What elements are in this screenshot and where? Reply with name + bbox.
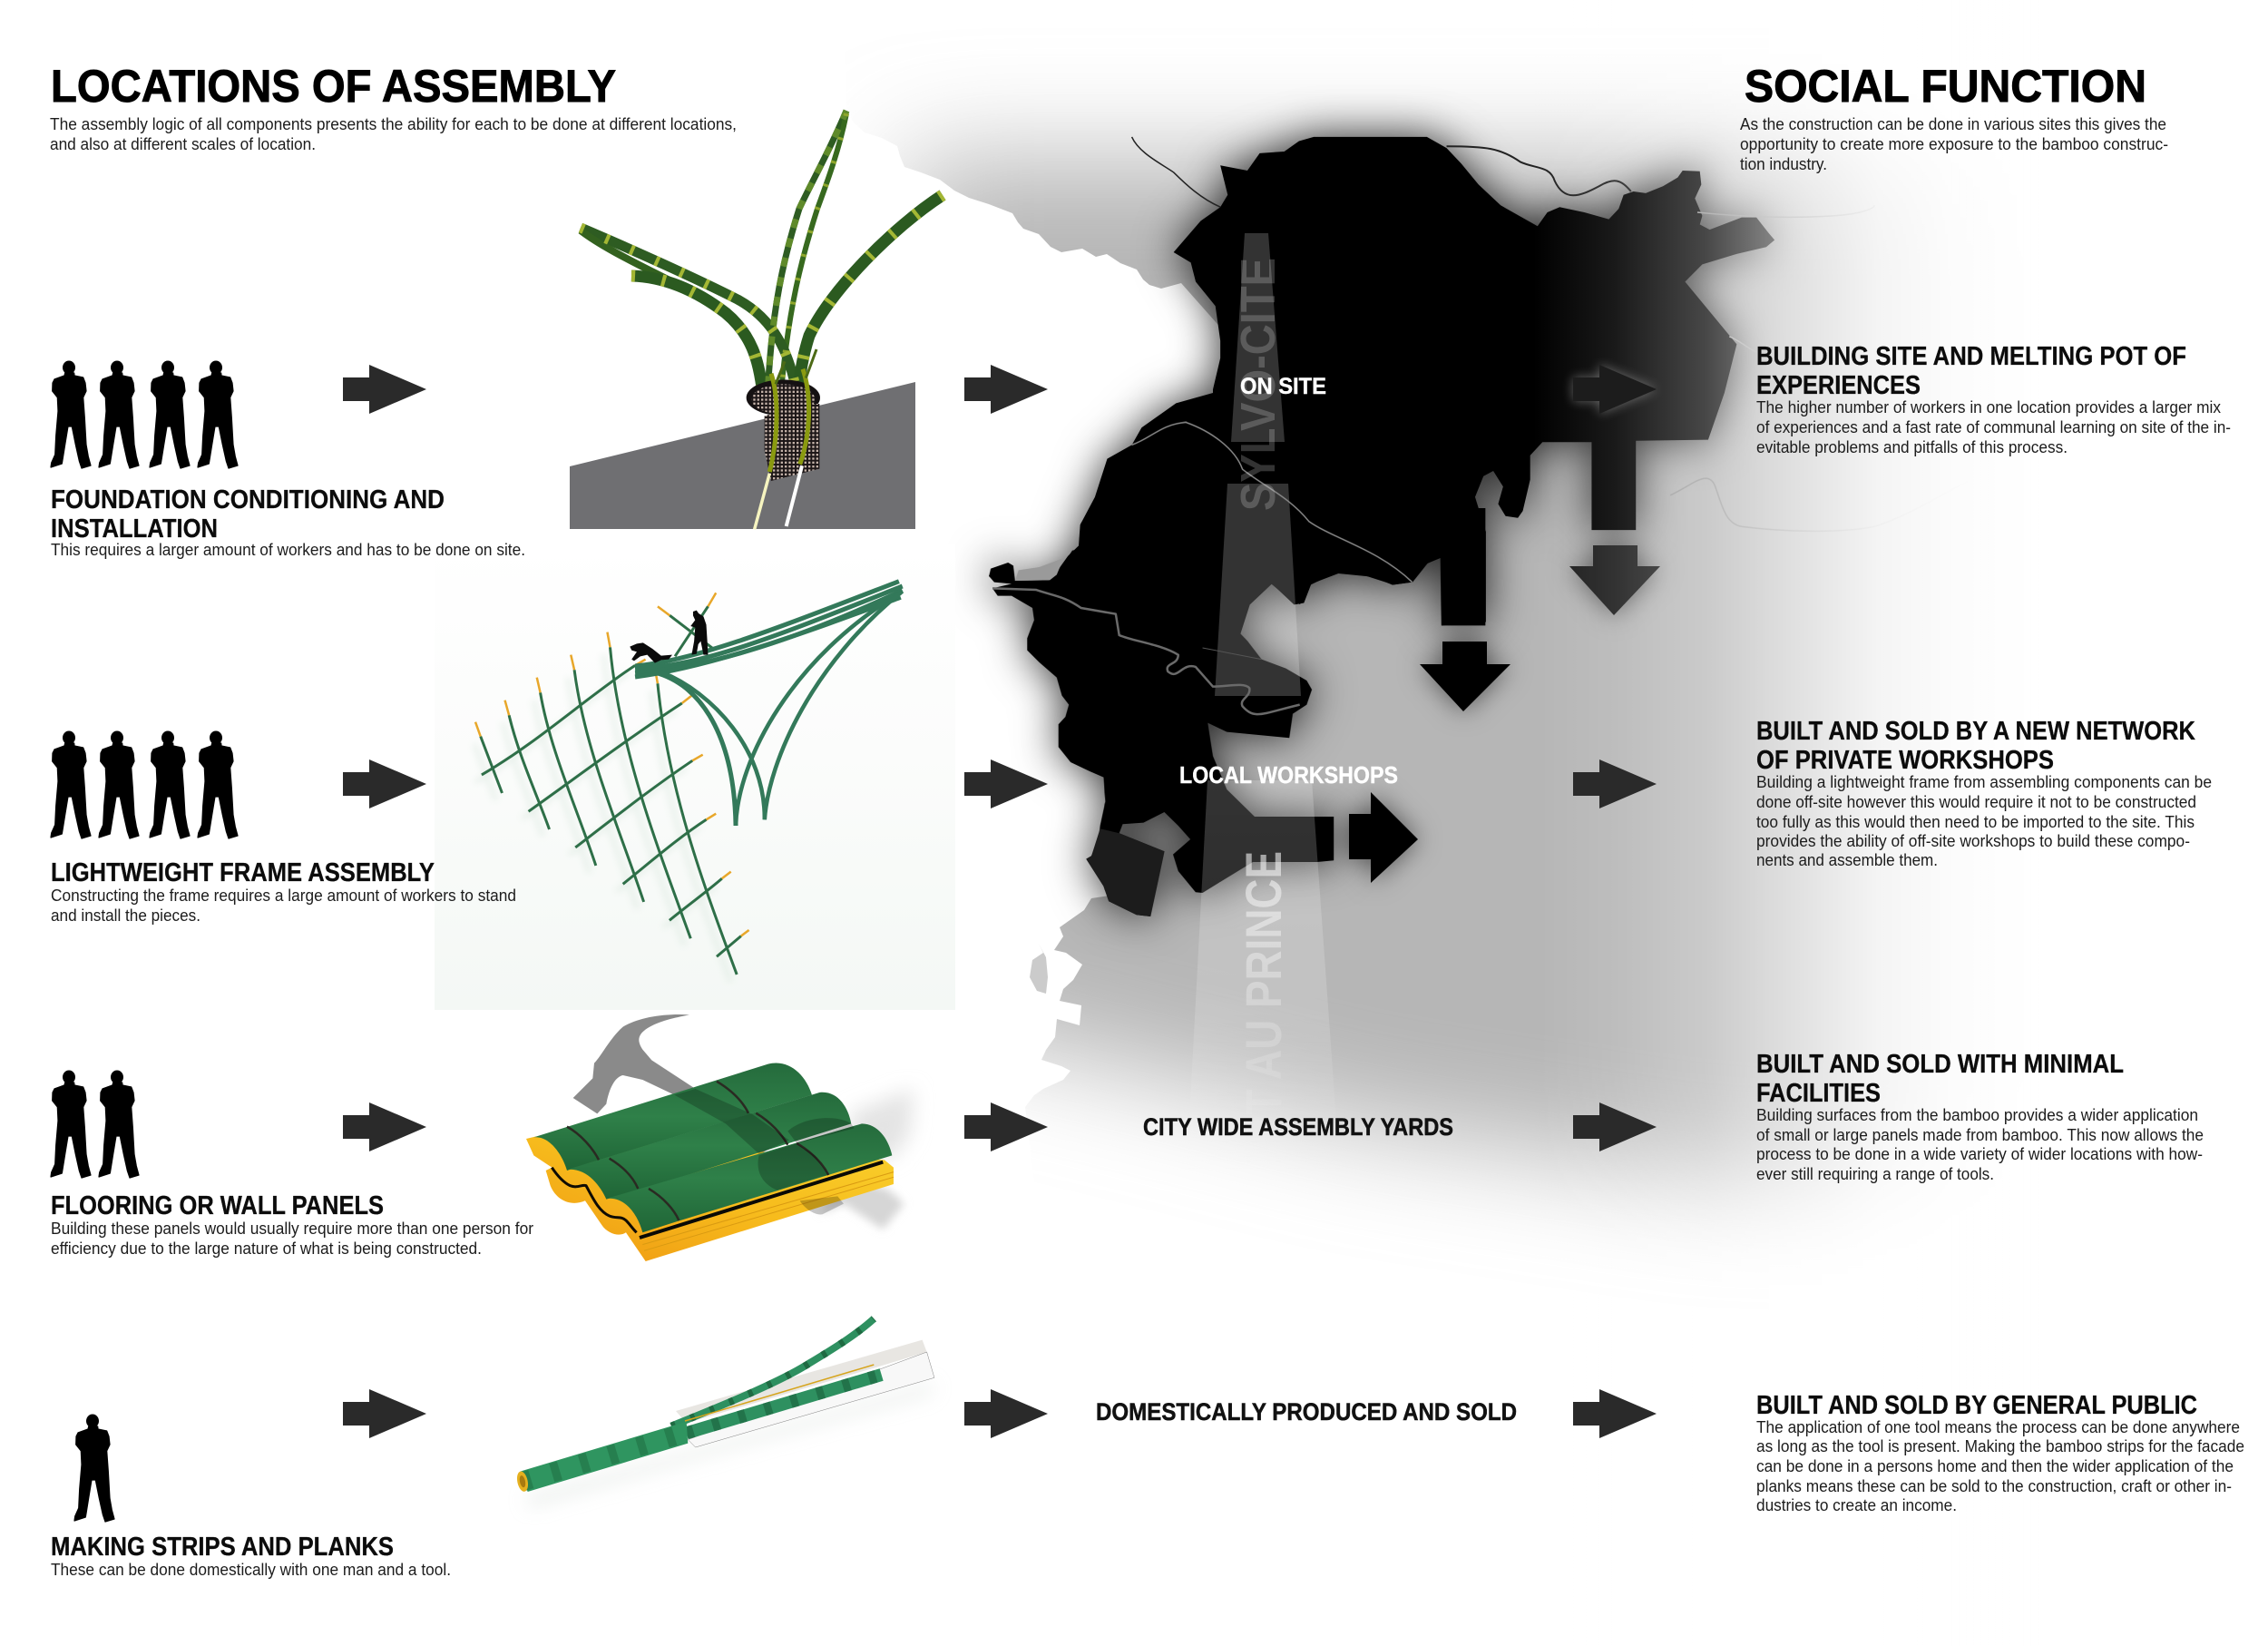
arrow: row 2 component to location [964, 759, 1048, 808]
big arrow: on site down [1569, 545, 1660, 615]
arrow: on site to social function [1573, 365, 1657, 414]
intro text: social function: As the construction can be done in various sites this gives the [1740, 115, 2166, 133]
text: flooring or wall panels [51, 1191, 533, 1258]
white fade over the right side of the map [1533, 0, 2268, 1646]
map: rivers [992, 137, 1968, 714]
text: general public: planks means these can be sold to the construction, craft or other in- [1756, 1477, 2232, 1495]
figure: kneeling worker [630, 642, 672, 663]
label: city wide assembly yards: CITY WIDE ASSEMBLY YARDS [1143, 1113, 1453, 1141]
text: foundation conditioning: FOUNDATION CONDITIONING AND [51, 485, 445, 514]
foundation sticks and spikes [755, 349, 816, 529]
row 4 worker: single figure [74, 1414, 114, 1522]
white coastline land mass [0, 0, 1252, 1646]
map: grey strait patch [1015, 558, 1063, 581]
map: PORT AU PRINCE road name: PORT AU PRINCE [1235, 851, 1292, 1205]
background: blurred grey map field [907, 159, 2087, 1180]
text: minimal facilities: Building surfaces from the bamboo provides a wider application [1756, 1106, 2198, 1124]
text: lightweight frame assembly: LIGHTWEIGHT FRAME ASSEMBLY [51, 858, 435, 887]
panel: dark joints [567, 1082, 828, 1220]
label: local workshops: LOCAL WORKSHOPS [1179, 761, 1398, 789]
text: private workshops: done off-site however this would require it not to be constructed [1756, 793, 2196, 811]
panel: green bamboo tiles [533, 1063, 892, 1232]
arrow: row 4 worker to component [343, 1389, 426, 1438]
arrow: row 4 component to location [964, 1389, 1048, 1438]
arrow: domestic to social function [1573, 1389, 1657, 1438]
text: minimal facilities [1756, 1050, 2204, 1183]
hammer silhouette [573, 1014, 789, 1154]
text: flooring or wall panels: FLOORING OR WALL PANELS [51, 1191, 384, 1220]
text: making strips and planks: These can be done domestically with one man and a tool. [51, 1561, 451, 1579]
tool: paper sheet [676, 1340, 934, 1447]
text: foundation conditioning: This requires a larger amount of workers and has to be done on site. [51, 541, 525, 559]
text: general public: The application of one tool means the process can be done anywhere [1756, 1418, 2240, 1436]
text: general public [1756, 1391, 2244, 1514]
map: southern landmass and workshop stem [989, 508, 1485, 916]
title: locations of assembly: LOCATIONS OF ASSEMBLY [51, 61, 616, 112]
row 1 workers: four figures [51, 361, 238, 468]
arrow: row 1 workers to component [343, 365, 426, 414]
title: social function: SOCIAL FUNCTION [1745, 61, 2146, 112]
text: private workshops: BUILT AND SOLD BY A NEW NETWORK [1756, 717, 2195, 746]
intro text: locations of assembly [50, 115, 737, 153]
text: lightweight frame assembly [51, 858, 516, 925]
intro text: social function: tion industry. [1740, 155, 1827, 173]
arrow: city wide to social function [1573, 1102, 1657, 1151]
tool: tube dark bands [523, 1433, 687, 1482]
illustration: lightweight bamboo frame [474, 582, 903, 982]
text: general public: dustries to create an income. [1756, 1496, 1957, 1514]
panel: yellow and orange base [526, 1137, 894, 1261]
bamboo stems [581, 111, 943, 404]
illustration: foundation with bamboo stems [570, 111, 943, 529]
panel: soft shadow wedge [850, 1089, 914, 1159]
row 2 workers: four figures [51, 731, 238, 838]
text: foundation conditioning: INSTALLATION [51, 514, 218, 544]
text: lightweight frame assembly: and install the pieces. [51, 906, 200, 925]
big arrow: workshops right [1349, 792, 1418, 883]
arrow: row 1 component to location [964, 365, 1048, 414]
figure: standing worker [690, 611, 708, 655]
text: making strips and planks: MAKING STRIPS AND PLANKS [51, 1533, 394, 1562]
text: lightweight frame assembly: Constructing the frame requires a large amount of workers to stand [51, 887, 516, 905]
arrow: row 3 component to location [964, 1102, 1048, 1151]
text: private workshops: provides the ability of off-site workshops to build these compo- [1756, 832, 2190, 850]
arrow: row 3 workers to component [343, 1102, 426, 1151]
frame: yellow tips [475, 593, 749, 936]
intro text: social function: opportunity to create more exposure to the bamboo construc- [1740, 135, 2168, 153]
text: building site and melting pot: The higher number of workers in one location provides a larger mix [1756, 398, 2221, 416]
label: domestically produced and sold: DOMESTICALLY PRODUCED AND SOLD [1096, 1398, 1517, 1426]
map: SYLVO-CITE road name: SYLVO-CITE [1231, 258, 1286, 511]
arrow: local workshops to social function [1573, 759, 1657, 808]
map: Port-au-Prince landmass silhouette [989, 137, 1774, 916]
text: building site and melting pot: BUILDING SITE AND MELTING POT OF [1756, 342, 2186, 371]
map: arrow glow halo, on site right [1573, 365, 1657, 414]
label: on site: ON SITE [1240, 374, 1326, 399]
hammer: handle tail shadow [819, 1177, 904, 1230]
illustration: bamboo strip splitting tool [515, 1318, 934, 1506]
text: private workshops [1756, 717, 2212, 869]
intro text: locations of assembly: and also at different scales of location. [50, 135, 316, 153]
text: minimal facilities: of small or large panels made from bamboo. This now allows the [1756, 1126, 2204, 1144]
text: building site and melting pot: of experiences and a fast rate of communal learning on site of the in- [1756, 418, 2231, 436]
intro text: locations of assembly: The assembly logic of all components presents the ability for each to be done at different locations, [50, 115, 737, 133]
text: private workshops: OF PRIVATE WORKSHOPS [1756, 746, 2054, 775]
text: general public: BUILT AND SOLD BY GENERAL PUBLIC [1756, 1391, 2197, 1420]
intro text: social function [1740, 115, 2168, 173]
text: private workshops: nents and assemble them. [1756, 851, 1938, 869]
text: flooring or wall panels: efficiency due to the large nature of what is being constructed. [51, 1239, 482, 1258]
map: northern landmass [1043, 137, 1774, 635]
frame: lattice shadow [474, 654, 730, 982]
tool: split strips [671, 1318, 882, 1433]
panel: dark wave and shadow lines [552, 1162, 894, 1250]
map: translucent road bands [1187, 233, 1340, 1171]
tool: tube end ring [515, 1470, 530, 1493]
text: minimal facilities: FACILITIES [1756, 1079, 1881, 1108]
illustration: lightweight frame background [435, 544, 955, 1010]
text: private workshops: Building a lightweight frame from assembling components can be [1756, 773, 2212, 791]
text: minimal facilities: process to be done in a wide variety of wider locations with how- [1756, 1145, 2203, 1163]
frame: lattice members [481, 606, 741, 975]
text: building site and melting pot: evitable problems and pitfalls of this process. [1756, 438, 2068, 456]
tool: bamboo tube [520, 1422, 688, 1492]
arrow: row 2 workers to component [343, 759, 426, 808]
tool: ground shadow [526, 1384, 934, 1506]
grey ground plane [570, 382, 915, 529]
map: lighter south-west peninsula [1086, 828, 1164, 916]
text: building site and melting pot: EXPERIENCES [1756, 371, 1921, 400]
row 3 workers: two figures [51, 1071, 139, 1178]
text: general public: can be done in a persons home and then the wider application of the [1756, 1457, 2234, 1475]
text: flooring or wall panels: Building these panels would usually require more than one person for [51, 1220, 533, 1238]
text: minimal facilities: BUILT AND SOLD WITH MINIMAL [1756, 1050, 2124, 1079]
text: general public: as long as the tool is present. Making the bamboo strips for the facade [1756, 1437, 2244, 1455]
hammer: shadow falling across tiles [674, 1089, 855, 1215]
woven foundation mesh [747, 379, 820, 481]
text: making strips and planks [51, 1533, 451, 1579]
illustration: hammer and bamboo panels [526, 1014, 914, 1261]
big arrow: left down [1420, 642, 1510, 711]
text: private workshops: too fully as this would then need to be imported to the site. This [1756, 813, 2195, 831]
text: minimal facilities: ever still requiring a range of tools. [1756, 1165, 1994, 1183]
coast: grey lagoon patch [1030, 944, 1048, 994]
text: building site and melting pot [1756, 342, 2231, 456]
frame: bundled arches [635, 582, 903, 826]
text: foundation conditioning [51, 485, 525, 559]
